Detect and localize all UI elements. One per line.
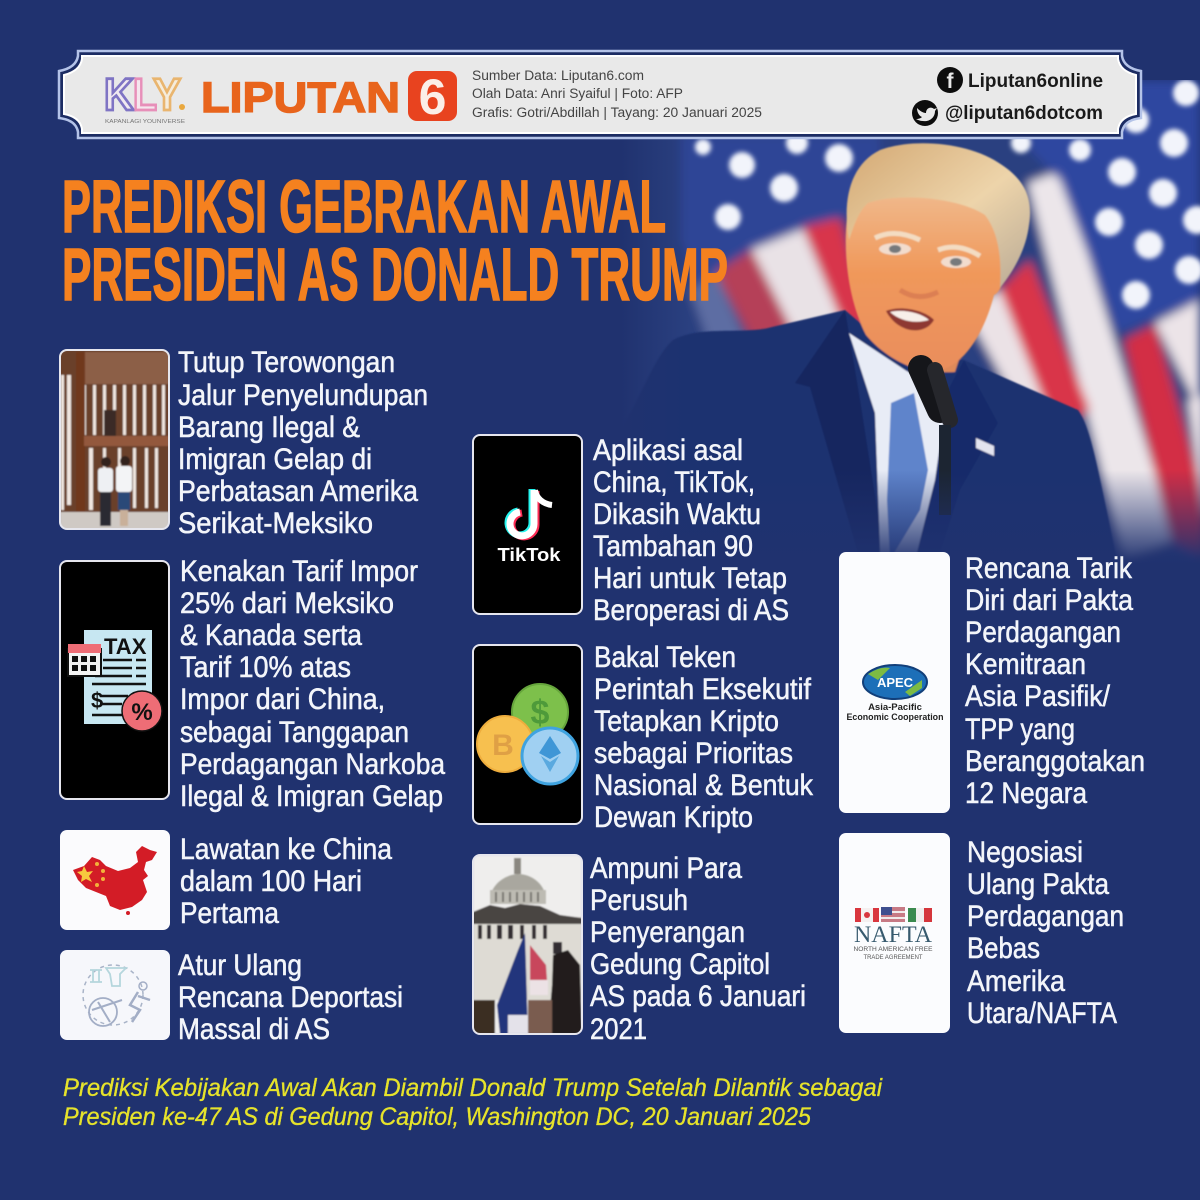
thumbnail: crypto coins: $ bbox=[531, 694, 550, 732]
text: Perdagangan bbox=[967, 900, 1124, 933]
thumbnail: tax icon: % bbox=[131, 699, 153, 726]
mouth bbox=[886, 308, 934, 330]
thumbnail: border fence photo bbox=[60, 350, 169, 530]
text: Rencana Tarik bbox=[965, 552, 1132, 585]
thumbnail: China map bbox=[60, 830, 170, 930]
Liputan6 logo: 6 bbox=[419, 69, 446, 125]
thumbnail: tax icon: $ bbox=[91, 688, 103, 713]
KLY logo: Y bbox=[153, 69, 181, 120]
text: Kenakan Tarif Impor bbox=[180, 555, 418, 588]
thumbnail: APEC logo: Economic Cooperation bbox=[846, 712, 944, 723]
item: Capitol pardon bbox=[473, 852, 806, 1046]
text: Gedung Capitol bbox=[590, 948, 770, 981]
text: Penyerangan bbox=[590, 916, 745, 949]
social handles: Liputan6online bbox=[968, 71, 1103, 92]
text: Rencana Deportasi bbox=[178, 981, 403, 1014]
text bbox=[178, 949, 403, 1046]
text: Imigran Gelap di bbox=[178, 443, 372, 476]
text: & Kanada serta bbox=[180, 619, 363, 652]
credits: Grafis: Gotri/Abdillah | Tayang: 20 Januari 2025 bbox=[472, 105, 762, 120]
text bbox=[593, 434, 789, 627]
text: Tambahan 90 bbox=[593, 530, 753, 563]
text: Lawatan ke China bbox=[180, 833, 393, 866]
thumbnail: TikTok logo bbox=[473, 435, 582, 614]
tie bbox=[887, 393, 928, 560]
thumbnail: Capitol riot photo bbox=[473, 855, 582, 1034]
eyes bbox=[879, 243, 911, 255]
thumbnail: deportation icon bbox=[60, 950, 170, 1040]
text: Atur Ulang bbox=[178, 949, 302, 982]
neck and face bbox=[943, 360, 960, 374]
text: Negosiasi bbox=[967, 836, 1083, 869]
text: Impor dari China, bbox=[180, 683, 385, 716]
text: Ulang Pakta bbox=[967, 868, 1110, 901]
thumbnail: crypto coins bbox=[473, 645, 582, 824]
credits bbox=[472, 68, 762, 120]
text: Ampuni Para bbox=[590, 852, 743, 885]
text: TPP yang bbox=[965, 713, 1075, 746]
text: Tutup Terowongan bbox=[178, 346, 395, 379]
shirt bbox=[848, 332, 944, 552]
item: mass deportation bbox=[60, 949, 403, 1046]
thumbnail: NAFTA logo bbox=[839, 833, 950, 1033]
text bbox=[180, 833, 393, 930]
social handles bbox=[912, 67, 1103, 126]
thumbnail: APEC logo: APEC bbox=[877, 675, 914, 690]
text: China, TikTok, bbox=[593, 466, 755, 499]
item: crypto bbox=[473, 641, 813, 834]
title: PRESIDEN AS DONALD TRUMP bbox=[62, 233, 728, 316]
text: Hari untuk Tetap bbox=[593, 562, 787, 595]
text: Perbatasan Amerika bbox=[178, 475, 419, 508]
flag backdrop bbox=[654, 80, 1200, 558]
text bbox=[180, 555, 446, 813]
text: Perintah Eksekutif bbox=[594, 673, 812, 706]
photo: Donald Trump in front of US flags bbox=[654, 80, 1200, 558]
text: Barang Ilegal & bbox=[178, 411, 360, 444]
text bbox=[965, 552, 1145, 810]
hair bbox=[847, 143, 1030, 288]
thumbnail: APEC logo bbox=[839, 552, 950, 813]
Liputan6 logo: LIPUTAN bbox=[201, 74, 400, 122]
thumbnail: NAFTA logo: TRADE AGREEMENT bbox=[864, 955, 923, 961]
lapel pin bbox=[976, 438, 994, 456]
KLY logo bbox=[104, 69, 185, 125]
text: sebagai Prioritas bbox=[594, 737, 793, 770]
text: dalam 100 Hari bbox=[180, 865, 362, 898]
text: Beranggotakan bbox=[965, 745, 1145, 778]
social handles: f bbox=[946, 70, 954, 93]
item: border tunnels bbox=[60, 346, 428, 540]
text bbox=[967, 836, 1124, 1030]
text: Bakal Teken bbox=[594, 641, 736, 674]
thumbnail: TikTok logo: TikTok bbox=[498, 545, 562, 565]
text: Tarif 10% atas bbox=[180, 651, 351, 684]
text: Amerika bbox=[967, 965, 1066, 998]
text: Aplikasi asal bbox=[593, 434, 743, 467]
text: Bebas bbox=[967, 932, 1040, 965]
thumbnail: tax icon bbox=[60, 561, 169, 799]
text: 25% dari Meksiko bbox=[180, 587, 394, 620]
item: TPP withdrawal bbox=[839, 552, 1145, 813]
text: Dewan Kripto bbox=[594, 801, 753, 834]
thumbnail: APEC logo: Asia-Pacific bbox=[868, 702, 922, 713]
credits: Olah Data: Anri Syaiful | Foto: AFP bbox=[472, 86, 683, 101]
text: Jalur Penyelundupan bbox=[178, 379, 428, 412]
social handles: @liputan6dotcom bbox=[945, 103, 1103, 124]
text: Perdagangan Narkoba bbox=[180, 748, 446, 781]
text: Utara/NAFTA bbox=[967, 997, 1117, 1030]
text: Nasional & Bentuk bbox=[594, 769, 813, 802]
credits: Sumber Data: Liputan6.com bbox=[472, 68, 644, 83]
text: Tetapkan Kripto bbox=[594, 705, 779, 738]
text: Perdagangan bbox=[965, 616, 1121, 649]
KLY logo: K bbox=[104, 69, 134, 120]
KLY logo: L bbox=[133, 69, 157, 120]
text: Pertama bbox=[180, 897, 280, 930]
text: Diri dari Pakta bbox=[965, 584, 1134, 617]
text bbox=[590, 852, 806, 1046]
item: TikTok bbox=[473, 434, 789, 627]
thumbnail: NAFTA logo: NAFTA bbox=[854, 922, 932, 947]
suit bbox=[654, 142, 1113, 552]
Liputan6 logo bbox=[201, 69, 457, 125]
text: Perusuh bbox=[590, 884, 688, 917]
text: 12 Negara bbox=[965, 777, 1088, 810]
title: PREDIKSI GEBRAKAN AWAL bbox=[62, 165, 666, 248]
text: sebagai Tanggapan bbox=[180, 716, 409, 749]
microphone bbox=[921, 368, 950, 515]
thumbnail: crypto coins: B bbox=[492, 729, 514, 762]
title bbox=[62, 165, 728, 316]
KLY logo: KAPANLAGI YOUNIVERSE bbox=[105, 119, 185, 125]
text: Massal di AS bbox=[178, 1013, 330, 1046]
thumbnail: tax icon: TAX bbox=[104, 634, 147, 659]
text bbox=[594, 641, 813, 834]
text: Asia Pasifik/ bbox=[965, 680, 1111, 713]
footer note: Presiden ke-47 AS di Gedung Capitol, Washington DC, 20 Januari 2025 bbox=[63, 1103, 811, 1131]
text: Ilegal & Imigran Gelap bbox=[180, 780, 443, 813]
text: Serikat-Meksiko bbox=[178, 507, 373, 540]
text: Kemitraan bbox=[965, 648, 1086, 681]
text: Dikasih Waktu bbox=[593, 498, 761, 531]
item: import tariffs bbox=[60, 555, 446, 813]
item: visit to China bbox=[60, 830, 393, 930]
thumbnail: NAFTA logo: NORTH AMERICAN FREE bbox=[854, 947, 932, 953]
text: Beroperasi di AS bbox=[593, 594, 789, 627]
footer note bbox=[63, 1074, 883, 1131]
flag stars bbox=[695, 80, 1200, 309]
footer note: Prediksi Kebijakan Awal Akan Diambil Donald Trump Setelah Dilantik sebagai bbox=[63, 1074, 883, 1102]
header banner bbox=[59, 51, 1141, 138]
text bbox=[178, 346, 428, 540]
nose bbox=[900, 290, 938, 297]
item: NAFTA renegotiation bbox=[839, 833, 1124, 1033]
text: AS pada 6 Januari bbox=[590, 980, 806, 1013]
text: 2021 bbox=[590, 1013, 647, 1046]
